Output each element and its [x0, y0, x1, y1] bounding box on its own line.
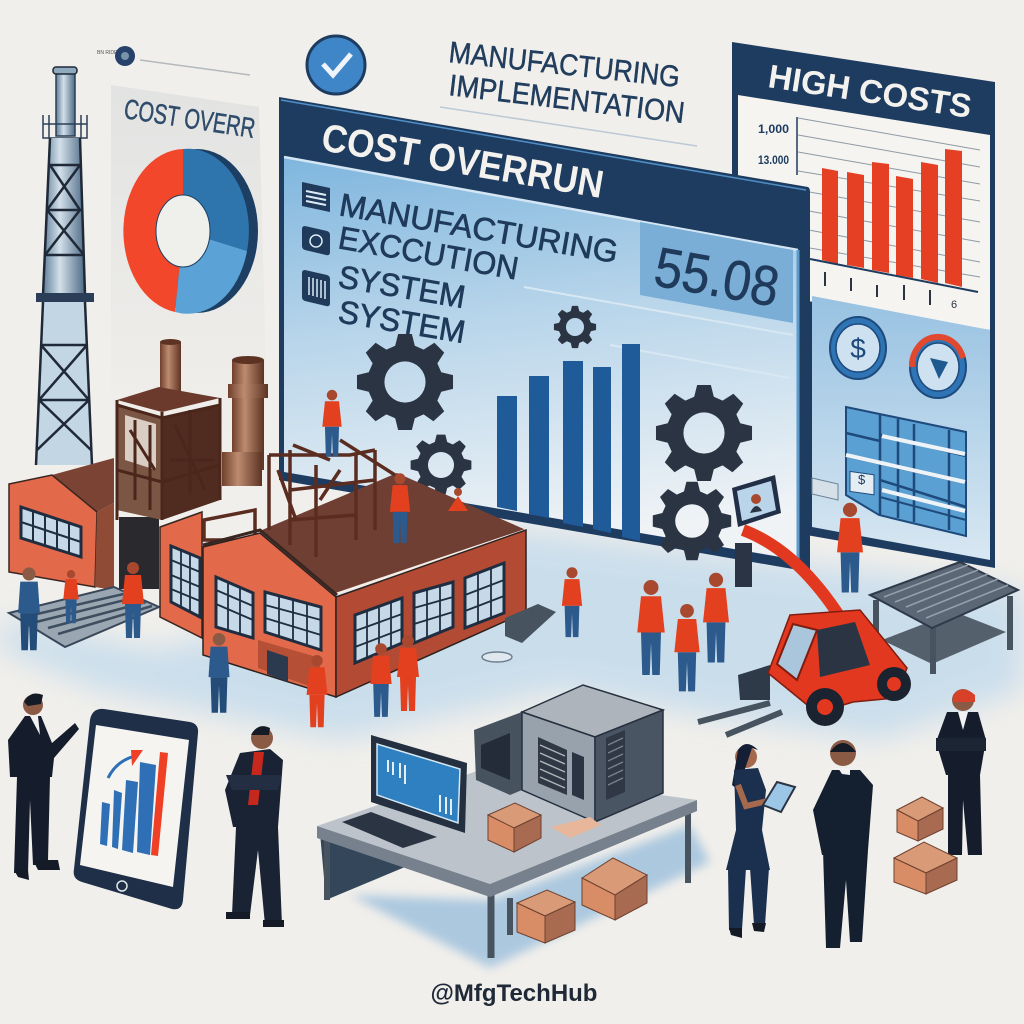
left wing wall	[9, 475, 97, 587]
attribution: @MfgTechHub	[431, 980, 597, 1007]
forks	[698, 703, 782, 735]
tablet bar chart	[100, 750, 168, 856]
crane post	[735, 543, 752, 587]
man from behind	[813, 740, 873, 948]
chimney two	[222, 356, 268, 486]
icon: dollar	[830, 317, 886, 379]
forklift body	[768, 610, 907, 713]
table dollar cell: $	[858, 472, 866, 487]
panel: small donut chart card	[111, 85, 268, 440]
loading platform	[9, 587, 159, 647]
icon: down gauge	[910, 336, 966, 398]
text block: manufacturing execution system	[336, 186, 621, 350]
icon: small header marks: BN RIDE	[97, 50, 118, 56]
machine tower	[117, 387, 220, 520]
heading: manufacturing implementation: MANUFACTURING	[447, 36, 681, 94]
tablet with chart	[74, 709, 198, 909]
heading: manufacturing implementation: IMPLEMENTATION	[447, 69, 686, 130]
bar chart: blue bars	[497, 344, 640, 541]
icon: gear badge	[302, 226, 330, 255]
heading: high costs: HIGH COSTS	[766, 57, 974, 125]
workers	[18, 390, 863, 727]
floor shading	[0, 530, 1024, 740]
text block: manufacturing execution system: MANUFACTURING	[337, 186, 621, 270]
floor boxes	[517, 797, 957, 943]
desk shadow	[350, 825, 710, 968]
work table right	[870, 562, 1018, 674]
keyboard	[342, 812, 437, 848]
donut chart	[123, 149, 258, 314]
presenter	[8, 694, 79, 880]
left wing window	[21, 507, 81, 557]
main roof	[262, 473, 526, 595]
front gable wing	[203, 530, 337, 697]
desk with machine	[317, 685, 697, 958]
heading: cost overrun: COST OVERRUN	[318, 116, 607, 207]
heading: manufacturing implementation	[447, 36, 686, 130]
box on the desk	[488, 803, 541, 852]
monitor on boom	[732, 475, 781, 527]
data table	[812, 407, 966, 536]
mid wing	[160, 512, 202, 638]
main right wall	[336, 530, 526, 697]
rooftop scaffolding	[204, 440, 395, 557]
bar chart: high costs: 1,000	[758, 124, 789, 136]
text block: manufacturing execution system: EXCCUTION	[336, 219, 521, 286]
icon: gears	[357, 306, 752, 560]
businesspeople	[8, 689, 986, 948]
manhole	[482, 652, 512, 662]
left wing roof	[52, 458, 114, 512]
tower	[36, 67, 94, 465]
table dollar cell	[850, 471, 874, 495]
woman with tablet	[726, 744, 795, 938]
paper	[551, 817, 601, 838]
heading: cost overr: COST OVERR	[122, 93, 257, 144]
icon: dollar: $	[850, 333, 866, 364]
metric panel	[640, 222, 793, 323]
tower doorway	[119, 517, 159, 589]
right wall windows	[355, 563, 504, 663]
arms crossed man	[225, 726, 284, 927]
panel: cost overrun main screen	[279, 97, 810, 572]
icon: list	[302, 182, 330, 212]
icon: check badge	[307, 36, 365, 94]
text block: manufacturing execution system: SYSTEM	[336, 293, 468, 350]
icon: barcode	[302, 270, 330, 306]
bar chart: high costs	[758, 117, 980, 311]
bar chart: high costs: 13.000	[758, 155, 789, 167]
panel: high costs	[732, 42, 995, 568]
hand tablet	[763, 782, 795, 812]
monitor	[371, 735, 467, 833]
crate near the factory	[505, 604, 556, 643]
machine unit	[474, 685, 663, 822]
icon: small header marks	[97, 46, 250, 75]
chimney one	[160, 339, 181, 406]
text block: manufacturing execution system: SYSTEM	[336, 258, 468, 315]
bar chart: high costs: 6	[951, 299, 957, 311]
factory building	[9, 339, 526, 697]
man by boxes	[936, 689, 986, 855]
metric: 55.08: 55.08	[650, 235, 784, 319]
crane boom	[743, 530, 862, 655]
forklift	[698, 475, 911, 735]
